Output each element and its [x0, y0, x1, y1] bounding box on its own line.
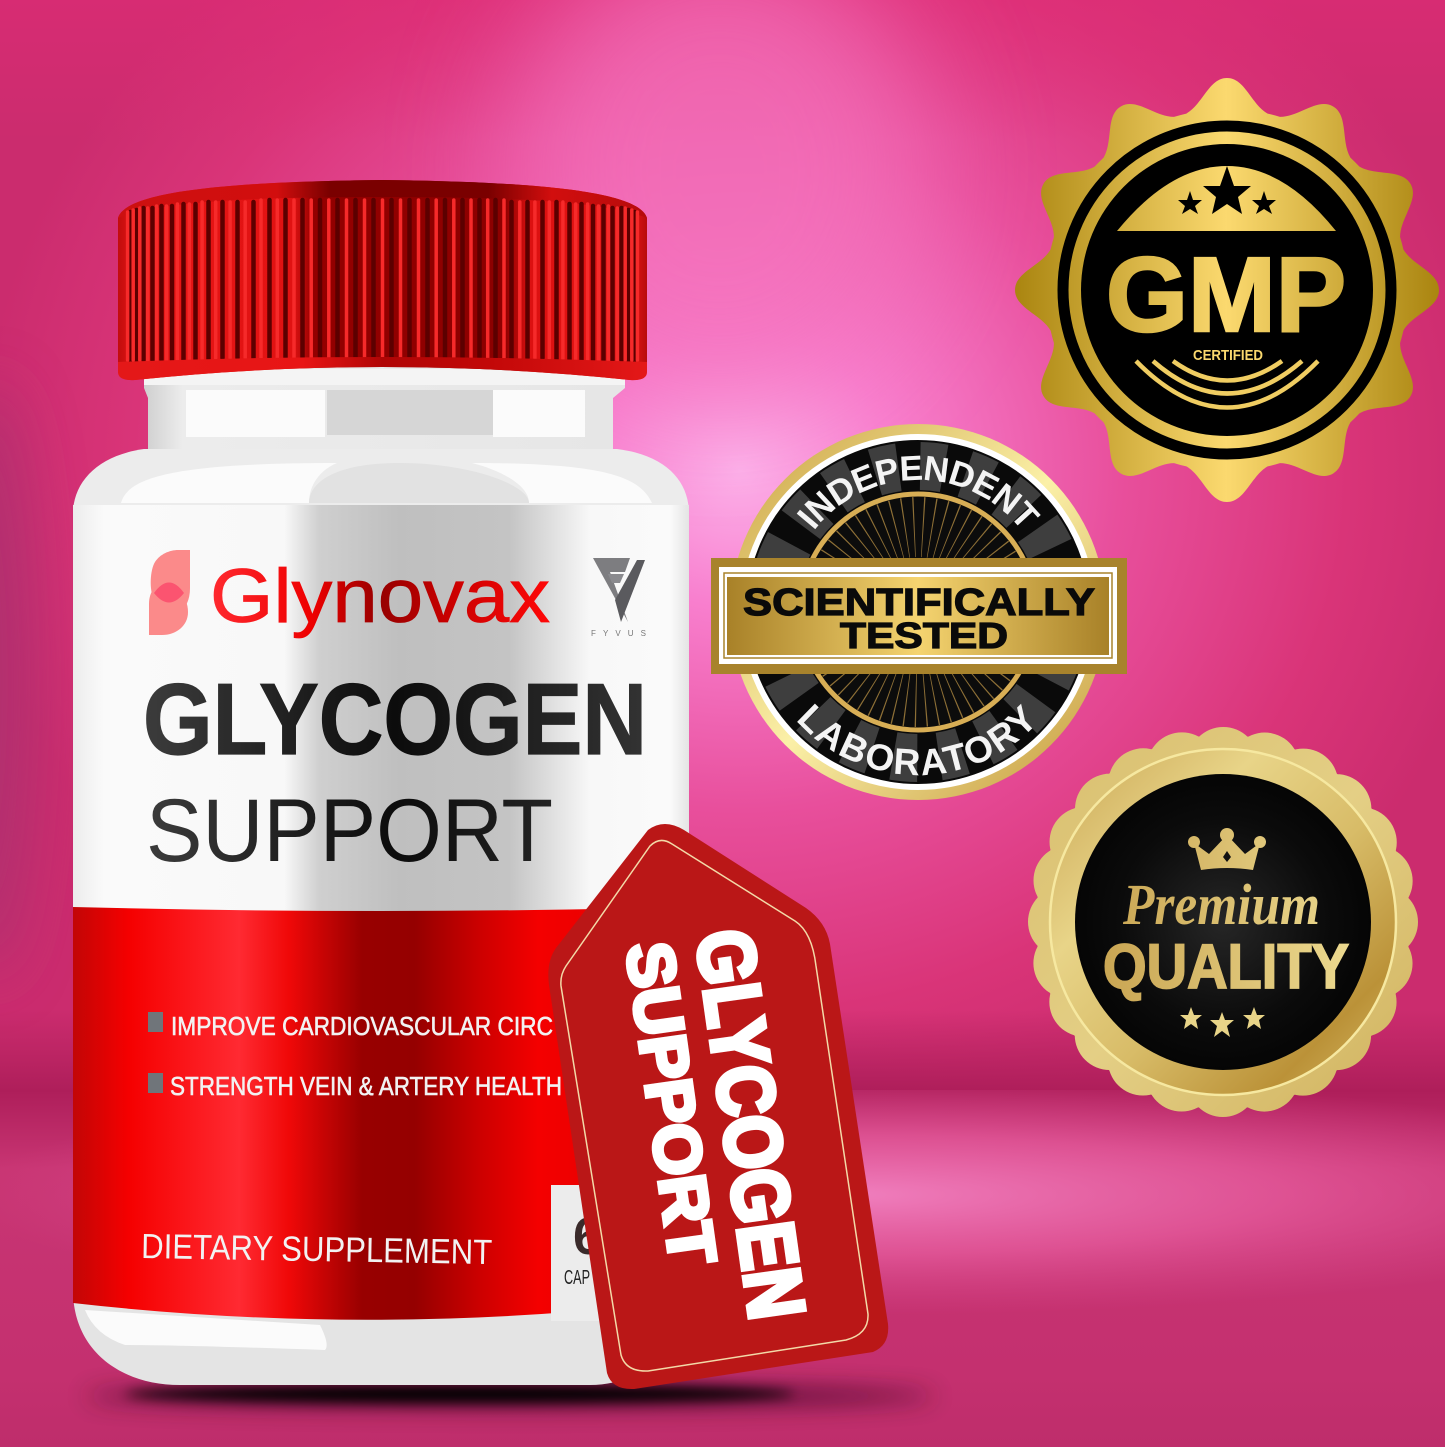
premium script text: Premium: [1122, 872, 1320, 937]
inner gold ring: [1050, 749, 1396, 1095]
bottle shadow: [85, 1385, 935, 1407]
background: studio floor: [0, 1090, 1445, 1447]
certified text: CERTIFIED: [1193, 347, 1263, 364]
scalloped gold seal: [1010, 70, 1445, 510]
white capsule count box: 6: [573, 1208, 602, 1266]
quality text: QUALITY: [1103, 932, 1349, 1002]
ribbon text line two: TESTED: [840, 615, 1008, 656]
cap body: [118, 180, 647, 380]
white ring and black disc: [743, 437, 1093, 787]
product bottle: [73, 180, 689, 1385]
gold rim: [730, 424, 1106, 800]
white label panel: [73, 505, 689, 915]
badge: GMP certified: [1010, 70, 1445, 510]
three stars: [1180, 1007, 1265, 1037]
gold arch with stars: [1117, 166, 1336, 231]
sticker tag: glycogen support: [548, 824, 888, 1389]
inner sunburst disc: [800, 494, 1036, 730]
scalloped gold rim: [1036, 735, 1410, 1109]
ribbon: [711, 558, 1127, 674]
red label band: [73, 907, 689, 1320]
tag inner line: [561, 840, 868, 1371]
benefit bullet two: STRENGTH VEIN & ARTERY HEALTH: [170, 1071, 562, 1101]
ribbon text line one: SCIENTIFICALLY: [743, 582, 1095, 624]
background: pink studio wall: [0, 0, 1445, 1100]
bottle base: [73, 1290, 689, 1385]
tag heading line two: SUPPORT: [612, 938, 731, 1269]
badge: premium quality: [1036, 735, 1410, 1109]
crown icon: [1188, 828, 1266, 870]
bottle neck: [144, 365, 625, 455]
product subtitle: SUPPORT: [146, 780, 553, 880]
grey ring segments: [772, 466, 1064, 758]
bottle shoulder: [73, 449, 689, 512]
cap bright ribs: [128, 200, 637, 360]
product title: GLYCOGEN: [143, 664, 647, 776]
red ribbed cap: [118, 180, 647, 380]
black disc: [1075, 774, 1371, 1070]
brand name: Glynovax: [210, 554, 550, 639]
laboratory arc text: LABORATORY: [797, 704, 1032, 776]
benefit bullet one: IMPROVE CARDIOVASCULAR CIRC: [171, 1011, 553, 1041]
GMP text: GMP: [1106, 236, 1346, 354]
badge: independent laboratory: [711, 424, 1127, 800]
gold arcs: [1136, 361, 1318, 408]
dietary supplement line: DIETARY SUPPLEMENT: [141, 1227, 492, 1272]
Fyvus logo: [591, 558, 646, 638]
white capsule count box: CAP: [564, 1267, 590, 1289]
cap top rim: [118, 180, 647, 218]
tag shape: [548, 824, 888, 1389]
Fyvus logo: FYVUS: [591, 629, 646, 638]
white capsule count box: [551, 1185, 621, 1321]
tag heading line one: GLYCOGEN: [679, 924, 822, 1325]
cap lip: [118, 357, 647, 380]
cap dark ribs: [130, 200, 634, 360]
black rings: [1063, 126, 1391, 454]
independent arc text: INDEPENDENT: [796, 456, 1041, 530]
brand logo mark: [149, 550, 190, 635]
